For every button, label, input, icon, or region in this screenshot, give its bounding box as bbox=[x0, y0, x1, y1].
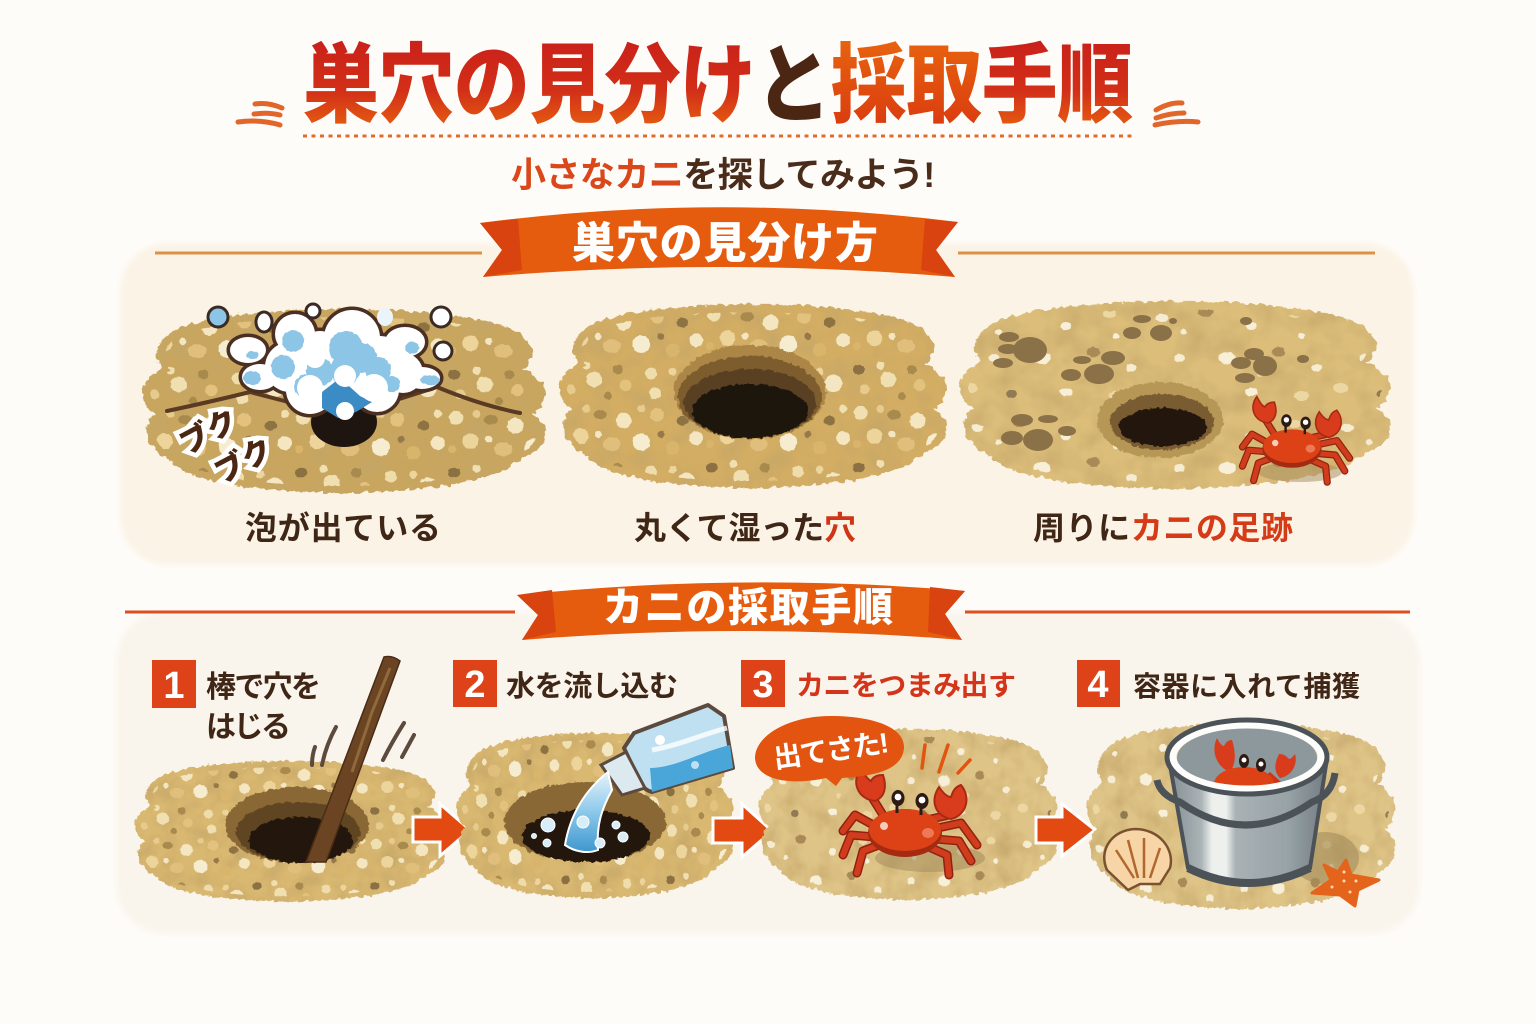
step 2 bbox=[453, 660, 733, 898]
step 1 number: 1 bbox=[163, 665, 185, 707]
starfish bbox=[1312, 860, 1379, 906]
crab footprints bbox=[993, 315, 1309, 451]
illustration: round wet hole bbox=[559, 304, 946, 488]
step 3 illustration bbox=[755, 716, 1057, 899]
step 4 illustration bbox=[1087, 720, 1395, 909]
ribbon heading: identification: 巣穴の見分け方 bbox=[572, 220, 878, 268]
step 1 illustration bbox=[135, 656, 445, 901]
step 1 text bbox=[206, 671, 321, 744]
label: foaming: 泡が出ている bbox=[245, 510, 441, 546]
step 4 text: 容器に入れて捕獲 bbox=[1133, 671, 1360, 702]
sound effect text: ブク bbox=[174, 403, 243, 461]
step 1 bbox=[135, 656, 445, 901]
illustration: crab tracks around hole bbox=[960, 301, 1390, 488]
step 3 text: カニをつまみ出す bbox=[796, 670, 1016, 701]
step 4 number: 4 bbox=[1087, 664, 1109, 706]
speech bubble bbox=[755, 716, 904, 786]
ribbon heading: capture: カニの採取手順 bbox=[603, 586, 893, 630]
label: crab footprints: 周りにカニの足跡 bbox=[1033, 510, 1293, 546]
arrow 1 to 2 bbox=[413, 804, 470, 856]
step 4 number bbox=[1077, 660, 1120, 707]
step 2 text: 水を流し込む bbox=[506, 670, 678, 703]
sound effect text: ブク bbox=[209, 432, 278, 490]
step 2 illustration bbox=[457, 705, 733, 898]
panel: how to identify burrows bbox=[120, 207, 1414, 565]
step 2 number bbox=[453, 660, 497, 707]
step 4 bbox=[1077, 660, 1395, 909]
step 3 number bbox=[741, 660, 785, 707]
illustration: foaming burrow bbox=[142, 304, 545, 493]
step 3 bbox=[741, 660, 1057, 899]
arrow 3 to 4 bbox=[1036, 804, 1095, 856]
step 3 number: 3 bbox=[752, 664, 774, 706]
arrow 2 to 3 bbox=[713, 804, 772, 857]
ribbon heading: identification bbox=[480, 207, 958, 277]
ribbon heading: capture bbox=[517, 582, 965, 640]
crab bbox=[843, 768, 977, 875]
step 1 number bbox=[152, 660, 196, 708]
scallop shell bbox=[1104, 829, 1171, 890]
step 1 text: はじる bbox=[206, 711, 291, 744]
speech bubble: 出てさた! bbox=[772, 727, 891, 774]
sound effect text bbox=[174, 403, 278, 490]
bucket bbox=[1157, 720, 1335, 883]
crab in bucket bbox=[1214, 738, 1296, 786]
title: 巣穴の見分けと採取手順 bbox=[303, 37, 1133, 134]
small crab bbox=[1242, 397, 1350, 482]
panel: capture procedure bbox=[116, 582, 1420, 934]
step 2 number: 2 bbox=[464, 664, 486, 706]
label: round wet hole: 丸くて湿った穴 bbox=[634, 510, 856, 546]
step 1 text: 棒で穴を bbox=[206, 671, 321, 704]
subtitle: 小さなカニを探してみよう! bbox=[511, 156, 935, 195]
